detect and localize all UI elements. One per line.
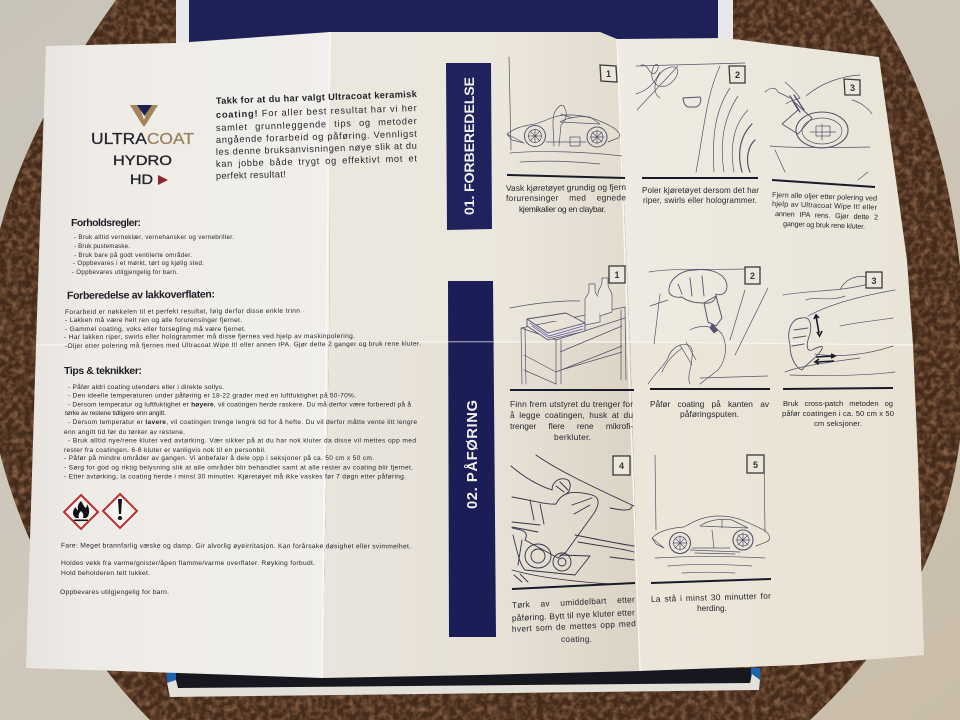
rule [512, 583, 635, 589]
step number 3 [866, 272, 882, 288]
intro text: samlet grunnleggende tips og metoder [216, 116, 417, 133]
tips list: - Den ideelle temperaturen under påføring er 18-22 grader med en luftfuktighet på 50-70%. [68, 392, 356, 400]
icon: exclamation hazard pictogram [103, 494, 137, 528]
tips list: - Påfør på mindre områder av gangen. Vi anbefaler å dele opp i seksjoner på ca. 50 cm x 50 cm. [64, 454, 374, 462]
illustration: hand wiping wheel arch [765, 75, 872, 180]
caption: trenger flere rene mikrofi- [510, 421, 633, 431]
caption: Fjern alle oljer etter polering ved [772, 190, 877, 203]
precautions list: - Bruk pustemaske. [74, 243, 130, 250]
section band: 02. Påføring [448, 281, 496, 637]
illustration: person washing car [507, 57, 622, 164]
step number 2: 2 [750, 271, 755, 281]
panel: Tips og teknikker [64, 365, 417, 480]
panel: logo Ultracoat Hydro HD [91, 105, 194, 187]
tips list [64, 383, 417, 480]
intro text: angående forarbeid og påføring. Vennligst [216, 129, 417, 145]
caption [510, 399, 633, 442]
rule [651, 579, 771, 583]
tips list: - Påfør aldri coating utendørs eller i direkte sollys. [68, 383, 224, 391]
illustration: hand with cloth over headlight [511, 455, 634, 584]
hazard statements: Holdes vekk fra varme/gnister/åpen flamme/varme overflater. Røyking forbudt. [61, 559, 315, 567]
panel: Forholdsregler [71, 217, 234, 276]
intro text [216, 89, 418, 181]
step 02-1: equipment cart [510, 266, 634, 442]
step number 2: 2 [735, 70, 740, 80]
step number 3: 3 [850, 83, 855, 93]
step 02-3: cross-patch method [782, 272, 895, 428]
illustration: cart with bottles and towels [510, 278, 626, 384]
step number 4: 4 [619, 461, 624, 471]
step 01-2: polish [636, 63, 759, 205]
step 02-4: wipe off [511, 455, 636, 644]
icon: vertical arrow [814, 315, 822, 336]
step number 3: 3 [871, 276, 877, 286]
heading: Tips og teknikker: Tips & teknikker: [64, 365, 142, 377]
intro text: perfekt resultat! [216, 169, 286, 181]
heading: Forholdsregler: Forholdsregler: [71, 217, 141, 229]
step number 1 [609, 266, 625, 283]
caption: Påfør coating på kanten av [650, 399, 770, 409]
hazard statements [60, 542, 411, 596]
caption: Vask kjøretøyet grundig og fjern [506, 182, 626, 193]
intro text: kan jobbe både trygt og effektivt mot et [216, 153, 417, 169]
intro text: les denne bruksanvisningen nøye slik at du [216, 141, 417, 157]
step number 2 [745, 267, 760, 284]
section band: 01. Forberedelse [446, 63, 492, 230]
caption: berkluter. [554, 432, 591, 442]
preparation list [64, 308, 421, 350]
tips list: - Sørg for god og riktig belysning slik at alle områder blir behandlet samt at alle rester av coating blir fjernet. [64, 464, 413, 472]
caption: påføring. Bytt til nye kluter etter [512, 607, 635, 623]
tips list: - Bruk alltid nye/rene kluter ved avtørking. Vær sikker på at du har nok kluter da disse vil mettes opp med [68, 436, 416, 444]
step number 5: 5 [753, 460, 758, 470]
caption: Poler kjøretøyet dersom det har [642, 186, 759, 195]
rule [772, 180, 875, 187]
caption [650, 399, 770, 419]
illustration: swirl marks and wheel arch [636, 63, 755, 172]
preparation list: Forarbeid er nøkkelen til et perfekt resultat, følg derfor disse enkle trinn [65, 308, 300, 316]
rule [507, 175, 625, 178]
caption: hvert som de mettes opp med [512, 618, 636, 634]
step 01-1: wash car [506, 57, 626, 214]
precautions list: - Oppbevares utilgjengelig for barn. [72, 269, 178, 276]
caption [772, 190, 878, 231]
step number 1 [600, 65, 617, 82]
section band: 02. Påføring: 02. PÅFØRING [464, 400, 481, 509]
intro text: coating! For aller best resultat har vi her [216, 103, 417, 120]
logo HD mark: HD [130, 171, 153, 187]
caption: forurensinger med egnede [506, 192, 626, 203]
preparation list: - Gammel coating, voks eller forsegling må være fjernet. [65, 325, 246, 333]
caption: påføringsputen. [680, 409, 739, 419]
tips list: - Etter avtørking, la coating herde i minst 30 minutter. Kjøretøyet må ikke vaskes før 7 døgn etter påføring. [64, 472, 406, 480]
hazard statements: Hold beholderen tett lukket. [61, 570, 150, 577]
logo wordmark: ULTRA COAT [91, 131, 194, 148]
icon: horizontal arrows [815, 354, 835, 364]
caption: coating. [561, 634, 592, 644]
caption [782, 399, 894, 428]
caption: å legge coatingen, husk at du [510, 410, 633, 420]
step number 1: 1 [606, 69, 611, 79]
tips list: - Dersom temperatur og luftfuktighet er høyere, vil coatingen herde raskere. Du må derfor være forberedt på å [68, 400, 411, 408]
step number 1: 1 [614, 270, 620, 280]
tips list: enn angitt tid før du tørker av restene. [64, 429, 185, 436]
caption [506, 182, 626, 214]
step number 2 [729, 66, 745, 83]
caption [651, 591, 771, 613]
precautions list: - Oppbevares i et mørkt, tørt og kjølig sted. [73, 260, 204, 267]
icon: chevron logo mark [130, 105, 158, 126]
rule [642, 177, 758, 179]
caption: kjemikalier og en claybar. [519, 204, 606, 214]
precautions list: - Bruk bare på godt ventilerte områder. [74, 252, 192, 259]
precautions list [72, 234, 234, 276]
caption [642, 186, 759, 205]
caption: La stå i minst 30 minutter for [651, 591, 771, 604]
preparation list: -Oljer etter polering må fjernes med Ultracoat Wipe It! eller annen IPA. Gjør dette 2 ganger og bruk rene kluter. [65, 340, 421, 350]
tips list: rester fra coatingen. 6-8 kluter er vanligvis nok til en personbil. [64, 447, 266, 454]
step number 5 [747, 455, 764, 473]
preparation list: - Lakken må være helt ren og alle forurensinger fjernet. [65, 316, 242, 324]
caption [512, 594, 636, 644]
illustration: gloved hand pouring bottle on pad [648, 269, 768, 384]
caption: påfør coatingen i ca. 50 cm x 50 [782, 409, 894, 418]
caption: riper, swirls eller hologrammer. [643, 196, 757, 205]
caption: ganger og bruk rene kluter. [783, 219, 865, 231]
icon: flammable hazard pictogram [64, 495, 98, 529]
caption: herding. [697, 603, 727, 613]
product box: top, navy lid [176, 0, 733, 46]
hazard statements: Fare: Meget brannfarlig væske og damp. Gir alvorlig øyeirritasjon. Kan forårsake døsighet eller svimmelhet. [61, 542, 411, 550]
illustration: hand with cross-patch arrows [783, 276, 895, 376]
step number 4 [613, 456, 630, 475]
section band: 01. Forberedelse: 01. FORBEREDELSE [462, 77, 478, 215]
step 02-2: apply coating to pad [648, 267, 770, 419]
caption: cm seksjoner. [814, 419, 862, 428]
step 02-5: cure [651, 455, 771, 613]
precautions list: - Bruk alltid verneklær, vernehansker og vernebriller. [74, 234, 234, 241]
caption: Finn frem utstyret du trenger for [510, 399, 633, 409]
tips list: - Dersom temperatur er lavere, vil coatingen trenge lengre tid for å hefte. Du vil derfor måtte vente litt lengre [68, 418, 417, 426]
hazard statements: Oppbevares utilgjengelig for barn. [60, 589, 169, 596]
rule [650, 388, 770, 390]
step number 3 [844, 79, 860, 95]
caption: Bruk cross-patch metoden og [783, 399, 893, 408]
caption: hjelp av Ultracoat Wipe It! eller [772, 199, 878, 212]
illustration: finished sports car [652, 455, 770, 573]
heading: Forberedelse av lakkoverflaten: Forberedelse av lakkoverflaten: [67, 288, 215, 302]
rule [510, 389, 634, 391]
caption: annen IPA rens. Gjør dette 2 [775, 209, 878, 222]
panel: Forberedelse av lakkoverflaten [64, 288, 421, 350]
preparation list: - Har lakken riper, swirls eller hologrammer må disse fjernes ved hjelp av maskinpolering. [64, 332, 355, 341]
caption: Tørk av umiddelbart etter [512, 594, 635, 610]
tips list: tørke av restene tidligere enn angitt. [65, 410, 166, 417]
logo sub-brand: HYDRO [113, 152, 172, 168]
intro text: Takk for at du har valgt Ultracoat keramisk [216, 89, 418, 106]
rule [783, 388, 893, 389]
product box: bottom edge [167, 668, 760, 697]
step 01-3: wipe with IPA [765, 75, 878, 231]
